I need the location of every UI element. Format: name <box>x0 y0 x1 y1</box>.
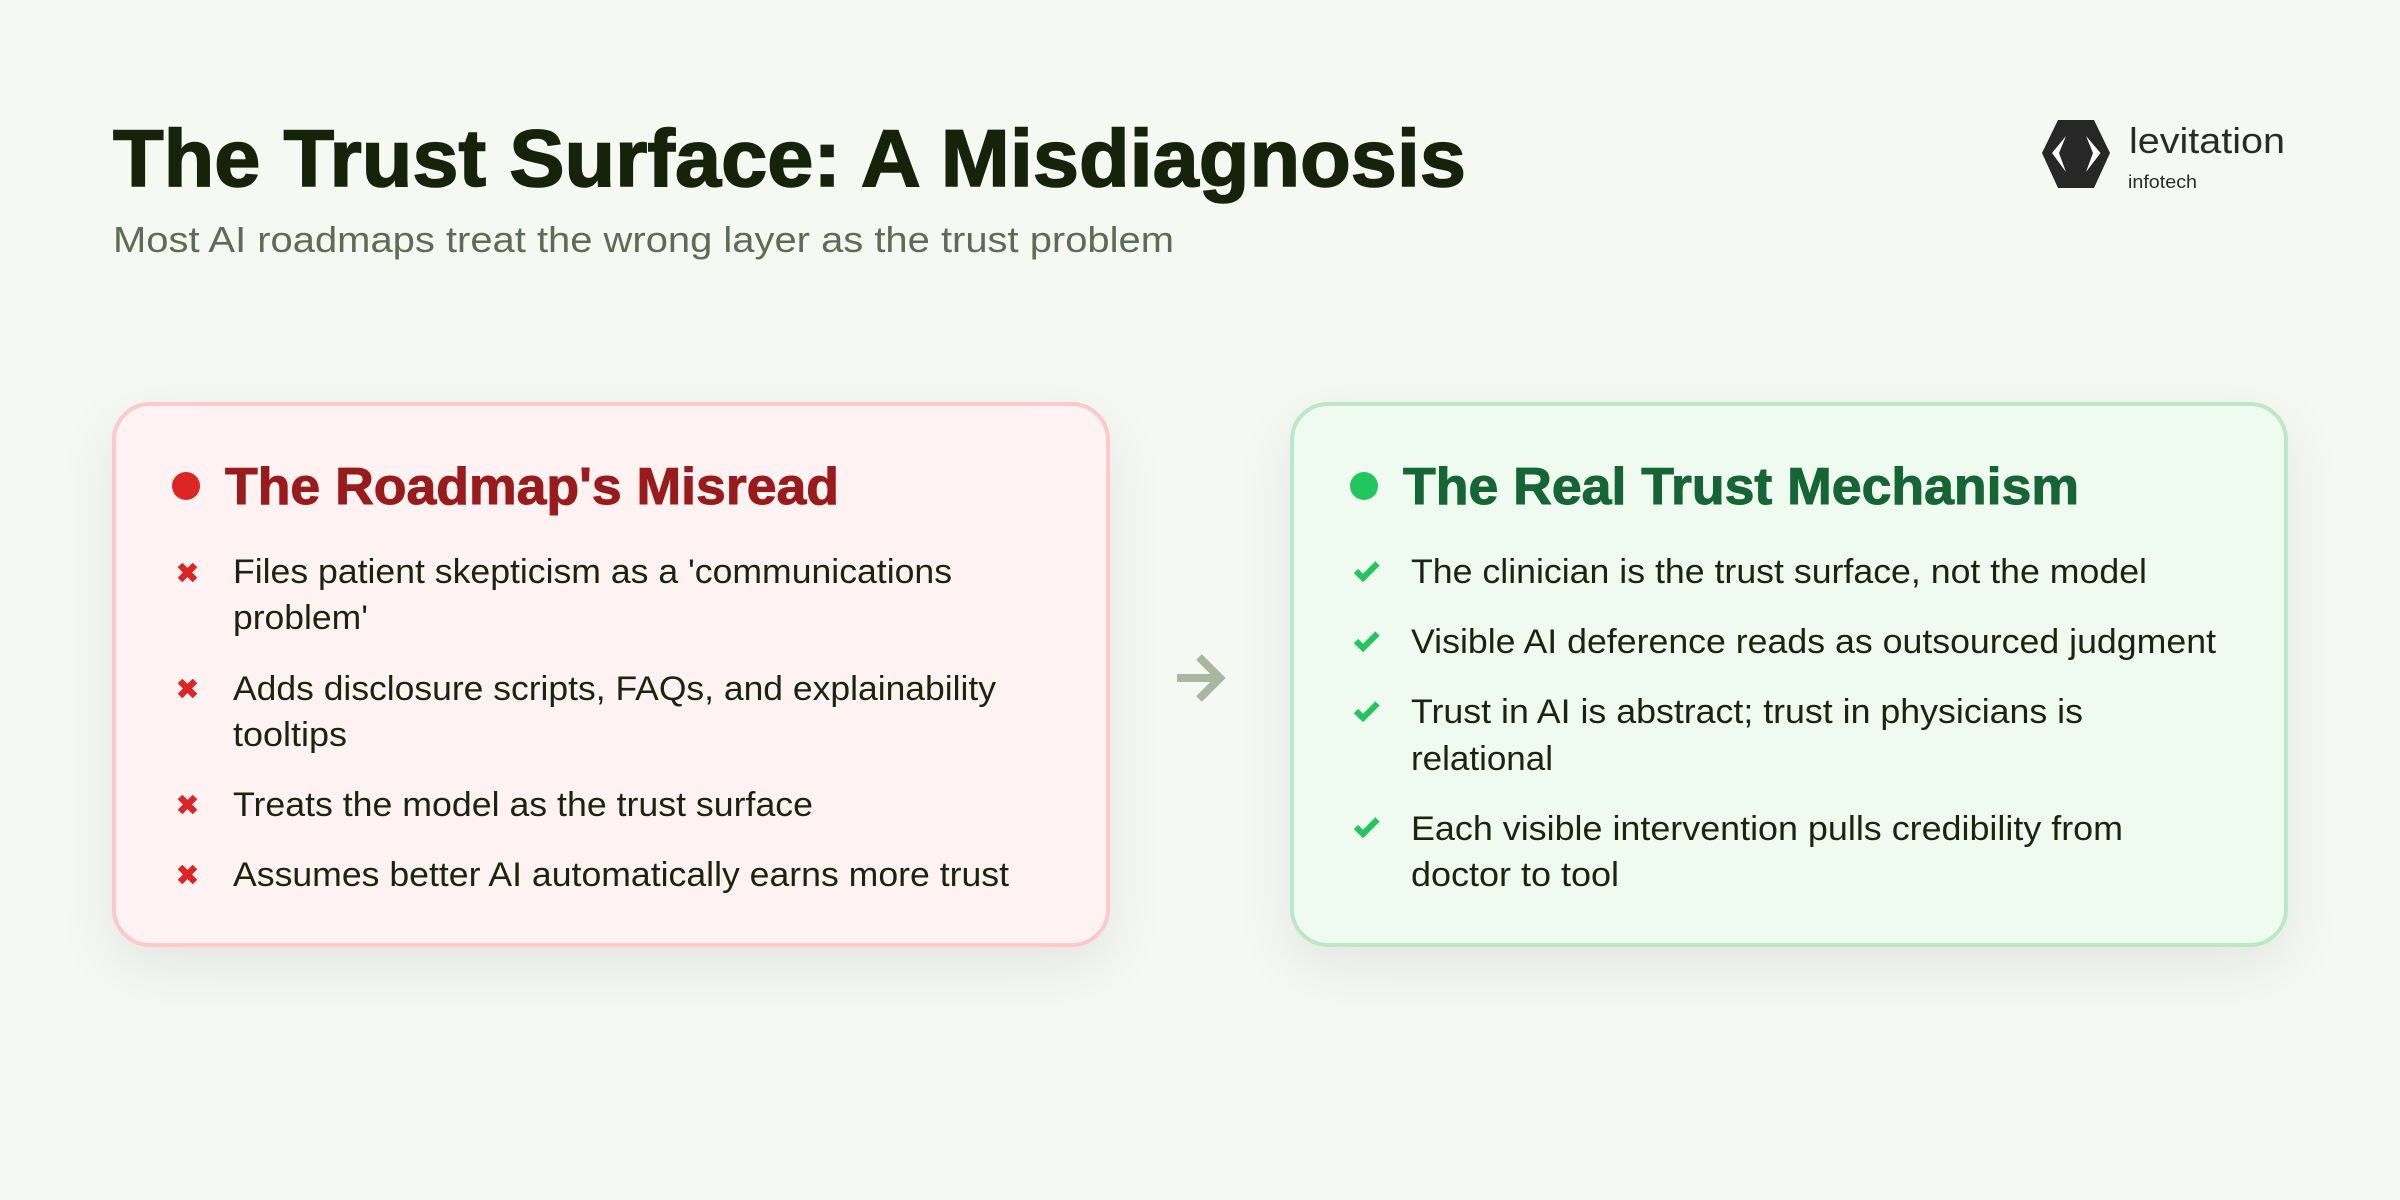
list item 4: Each visible intervention pulls credibility from <box>1411 810 2123 848</box>
list item 4: doctor to tool <box>1411 856 1619 894</box>
arrow <box>1177 654 1226 702</box>
logo sub-wordmark: infotech <box>2128 172 2197 192</box>
panel: the roadmap's misread <box>112 402 1110 947</box>
list item 2: Visible AI deference reads as outsourced judgment <box>1411 623 2217 661</box>
green status dot <box>1350 472 1378 500</box>
logo <box>2042 120 2285 192</box>
list item 1 <box>180 553 952 637</box>
panel heading: The Real Trust Mechanism <box>1403 458 2079 516</box>
list item 3: Treats the model as the trust surface <box>233 786 813 824</box>
list item 3: relational <box>1411 740 1553 778</box>
panel heading: The Roadmap's Misread <box>225 458 839 516</box>
list item 2: Adds disclosure scripts, FAQs, and explainability <box>233 670 996 708</box>
list item 1: problem' <box>233 599 368 637</box>
panel: the real trust mechanism <box>1290 402 2288 947</box>
list item 1: The clinician is the trust surface, not the model <box>1411 553 2147 591</box>
list item 4: Assumes better AI automatically earns more trust <box>233 856 1010 894</box>
subtitle: Most AI roadmaps treat the wrong layer as the trust problem <box>113 219 1174 260</box>
list item 2 <box>180 670 996 754</box>
red status dot <box>172 472 200 500</box>
list item 2: tooltips <box>233 716 347 754</box>
header <box>113 114 1466 260</box>
list item 1: Files patient skepticism as a 'communications <box>233 553 952 591</box>
list item 4 <box>1356 810 2123 894</box>
icon: hexagon with chevrons <box>2042 120 2110 188</box>
list item 3: Trust in AI is abstract; trust in physicians is <box>1411 693 2083 731</box>
title: The Trust Surface: A Misdiagnosis <box>113 114 1466 204</box>
list item 3 <box>1356 693 2083 778</box>
logo wordmark: levitation <box>2129 120 2285 161</box>
